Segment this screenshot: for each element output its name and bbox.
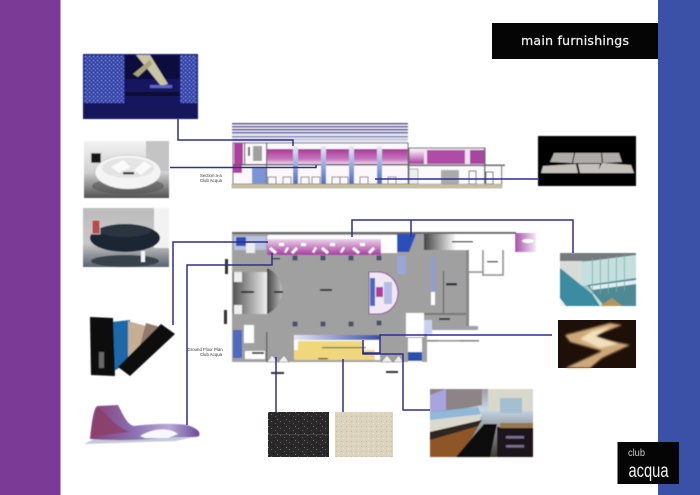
main floor (232, 233, 478, 362)
line: granite to plan (275, 357, 277, 412)
stairs bottom right (408, 338, 422, 362)
title: main furnishings (492, 23, 658, 59)
line: beige stone to plan (342, 359, 344, 412)
blue strip and dividers (431, 257, 435, 292)
entrance doors (267, 355, 289, 362)
pink booths (267, 236, 381, 255)
line: white sofa to section (170, 165, 316, 168)
photo: glass stair wall (560, 253, 636, 306)
logo: club acqua (618, 442, 679, 484)
line: modular sofa to section (375, 178, 538, 180)
left rooms (233, 272, 267, 314)
photo: dark round sofa (83, 208, 169, 267)
photo: purple chaise longue (84, 405, 200, 444)
central stage (369, 272, 398, 314)
line: glowing floor to plan (363, 335, 552, 353)
service rooms top (381, 235, 397, 253)
title: main furnishings: main furnishings (521, 33, 629, 48)
caption: section a-a: Section a-a (200, 173, 222, 178)
line: chaise to plan (187, 253, 272, 425)
end pink room (515, 233, 536, 252)
logo: club acqua: club (628, 448, 645, 459)
drawing: ground floor plan (224, 232, 536, 374)
photo: white round sofa (84, 141, 169, 198)
connector lines (170, 119, 573, 425)
upper pink band (267, 149, 408, 164)
swatch: beige stone (335, 412, 393, 457)
room labels (224, 241, 498, 374)
line: swatches to plan (173, 242, 268, 325)
bar yellow (294, 335, 380, 341)
photo: fabric swatches (90, 317, 175, 376)
rear rooms (468, 250, 503, 275)
drawing: section a-a (232, 123, 505, 188)
right blue band (658, 0, 700, 495)
photo: restaurant interior (430, 389, 533, 457)
photo: modular white sofa on black (538, 136, 636, 186)
columns (293, 256, 381, 326)
logo: club acqua: acqua (628, 461, 669, 482)
caption: ground floor plan: Club Acqua (200, 352, 223, 357)
blue stair area (234, 236, 266, 250)
line: glass wall to plan (352, 220, 573, 253)
caption: section a-a: Club Acqua (200, 178, 223, 183)
tables lower (268, 177, 396, 184)
building left upper (233, 143, 408, 184)
floor slab (232, 184, 502, 188)
line: blue club photo to section (178, 119, 293, 146)
building right part (408, 148, 485, 165)
roof stripes (232, 123, 408, 148)
left purple band (0, 0, 60, 495)
swatch: dark granite (268, 412, 329, 457)
photo: blue club interior (83, 54, 198, 119)
line: restaurant to plan (363, 350, 430, 410)
photo: glowing floor panels (558, 320, 636, 368)
pillars (293, 146, 298, 184)
caption: ground floor plan: Ground Floor Plan (188, 347, 223, 352)
